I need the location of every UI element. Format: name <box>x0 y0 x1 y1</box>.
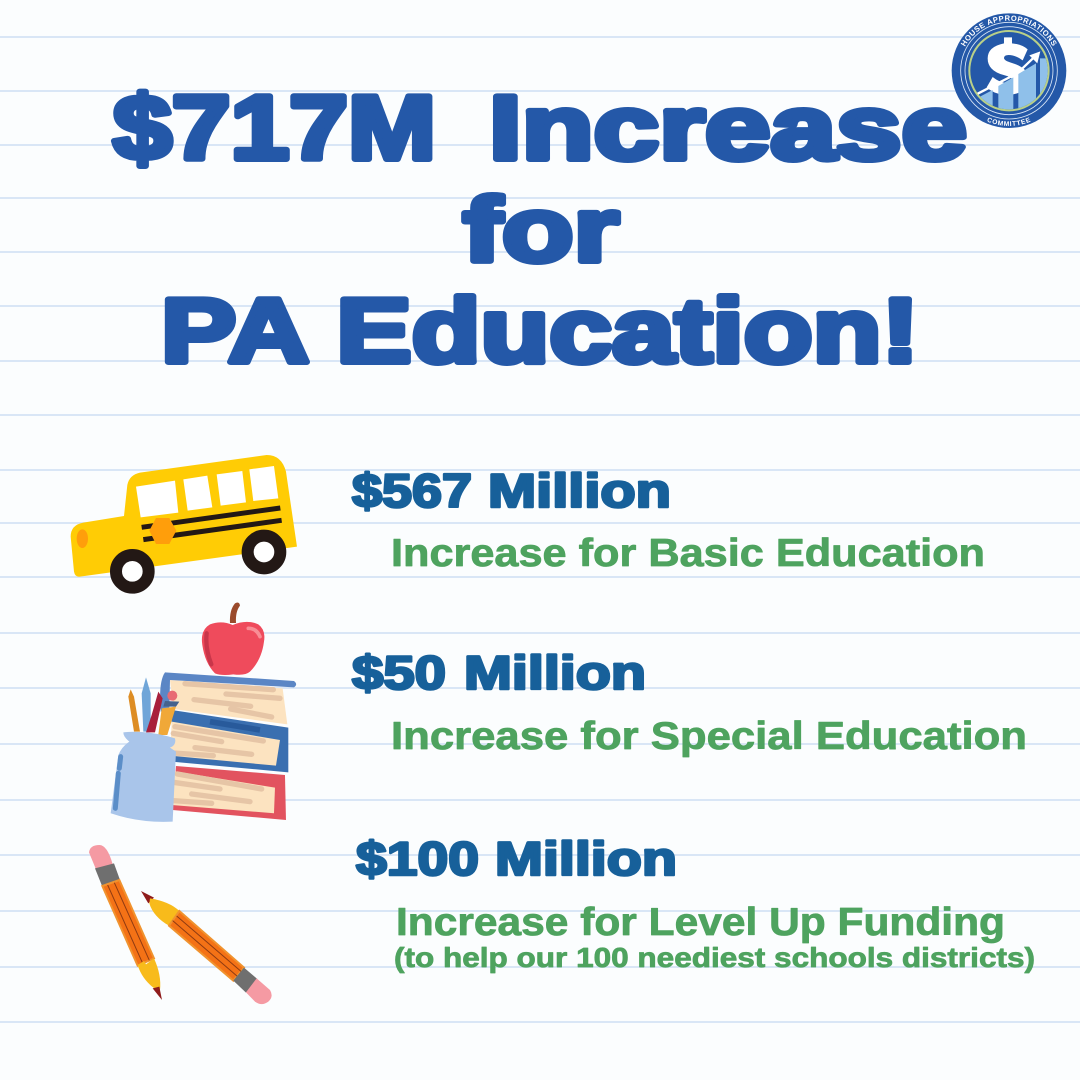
title: Increase <box>489 78 967 179</box>
title: PA Education! <box>161 281 919 382</box>
item: basic education <box>71 455 985 588</box>
heading: $100 Million <box>356 832 677 885</box>
title: for <box>463 180 619 281</box>
icon: House Appropriations Committee logo <box>952 13 1066 128</box>
title <box>113 78 967 382</box>
text: Increase for Level Up Funding: Increase for Level Up Funding <box>396 901 1005 944</box>
heading: $50 Million: Million <box>464 646 646 699</box>
title: $717M <box>113 78 436 179</box>
icon: school bus <box>71 455 297 588</box>
text: qualifier for Level Up Funding: (to help our 100 neediest schools districts) <box>394 942 1035 973</box>
heading: $100 Million: Million <box>495 832 677 885</box>
text: Increase for Special Education: Increase for Special Education <box>391 715 1027 758</box>
icon: House Appropriations Committee logo: COMMITTEE <box>988 117 1030 126</box>
icon: two pencils <box>89 845 272 1004</box>
heading: $567 Million: Million <box>488 464 671 517</box>
heading: $100 Million: $100 <box>356 832 479 885</box>
heading: $567 Million: $567 <box>352 464 472 517</box>
item: special education <box>111 603 1027 822</box>
heading: $50 Million <box>352 646 646 699</box>
heading: $50 Million: $50 <box>352 646 446 699</box>
icon: books, apple and pencil jar <box>111 603 296 822</box>
text: Increase for Basic Education: Increase for Basic Education <box>391 532 985 575</box>
heading: $567 Million <box>352 464 671 517</box>
icon: House Appropriations Committee logo: HOUSE APPROPRIATIONS <box>960 15 1056 46</box>
item: level up funding <box>89 832 1035 1004</box>
